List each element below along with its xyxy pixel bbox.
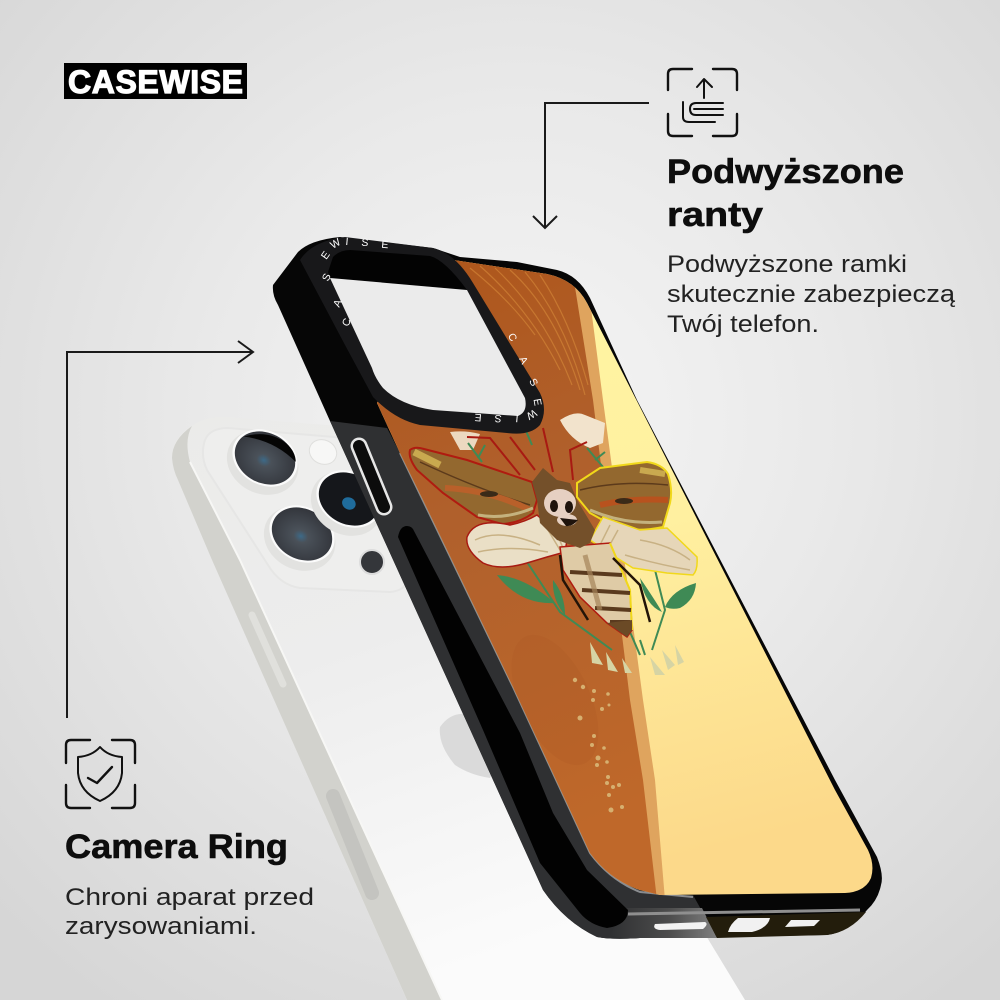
ring lettering: S — [361, 237, 369, 249]
left hindwing — [467, 515, 567, 567]
left forewing — [410, 448, 537, 524]
bottom lip gradient — [610, 908, 717, 938]
ring lettering: E — [319, 249, 333, 262]
ring lettering: A — [331, 298, 345, 309]
speaker holes — [654, 922, 707, 930]
bottom lip olive — [706, 912, 866, 938]
usb port — [728, 918, 770, 932]
abdomen tip — [607, 620, 632, 637]
abdomen right edge — [610, 543, 632, 630]
right forewing — [577, 462, 671, 530]
white phone — [172, 417, 745, 1000]
phone side band — [172, 426, 442, 1000]
bevel highlight — [400, 453, 693, 897]
arrow to camera ring — [67, 341, 253, 718]
ring lettering: E — [530, 398, 544, 407]
ring lettering: E — [381, 239, 389, 251]
side button upper — [252, 615, 283, 684]
description: raised edges: Twój telefon. — [667, 311, 819, 338]
arrow to raised edges — [533, 103, 649, 228]
orange field — [370, 250, 657, 900]
right flower — [560, 413, 605, 448]
description: camera ring — [65, 884, 314, 940]
moth illustration — [410, 413, 697, 812]
seed marks — [590, 642, 684, 675]
abdomen spine — [585, 555, 600, 610]
skull — [544, 489, 578, 526]
ring lettering: W — [328, 236, 343, 252]
description: raised edges — [667, 251, 956, 338]
icon: shield — [66, 740, 135, 808]
microphone hole — [785, 920, 820, 927]
ring lettering: S — [494, 412, 502, 424]
orange band — [370, 250, 665, 900]
lens 3 — [299, 458, 394, 548]
lens 1 — [215, 417, 310, 507]
black phone case — [273, 237, 882, 939]
icon: raised edge — [668, 69, 737, 136]
left flower — [450, 431, 480, 450]
lower lip line — [628, 910, 860, 914]
logo: CASEWISE — [68, 64, 243, 100]
ring lettering: A — [516, 355, 530, 366]
wood grain — [470, 266, 588, 395]
gold specks — [573, 678, 624, 812]
right hindwing — [590, 517, 697, 575]
ring lettering: C — [505, 331, 519, 344]
darker blotch — [494, 622, 616, 778]
lens 2 — [252, 493, 347, 583]
right leaf — [665, 583, 696, 609]
button slot — [359, 446, 384, 507]
ring lettering — [319, 236, 544, 424]
abdomen — [560, 543, 632, 637]
side button lower — [333, 796, 372, 893]
description: raised edges: Podwyższone ramki — [667, 251, 907, 278]
camera plateau — [203, 428, 406, 592]
side opening — [398, 526, 628, 928]
ring lettering: E — [474, 411, 482, 423]
band highlight — [190, 462, 442, 1000]
ring lettering: W — [524, 406, 539, 422]
thorax — [532, 468, 595, 548]
heading: Podwyższone ranty: ranty — [667, 196, 763, 234]
heading: Camera Ring: Camera Ring — [65, 828, 288, 866]
stems and small leaves — [468, 431, 665, 655]
back artwork panel — [370, 250, 890, 910]
flash — [305, 435, 341, 469]
heading: Podwyższone ranty — [667, 153, 904, 234]
window interior dark top — [328, 250, 467, 290]
lidar sensor — [360, 550, 384, 574]
right forewing detail — [580, 470, 668, 522]
ring lettering: I — [345, 236, 349, 248]
heading: Podwyższone ranty: Podwyższone — [667, 153, 904, 191]
ring lettering: S — [526, 377, 540, 388]
window opening — [330, 278, 526, 416]
ring lettering: S — [320, 272, 334, 283]
ring lettering: C — [340, 316, 354, 328]
wing folds — [475, 522, 690, 570]
black legs lower — [560, 555, 650, 622]
abdomen stripes — [570, 572, 631, 622]
description: raised edges: skutecznie zabezpieczą — [667, 281, 956, 308]
legs — [467, 428, 587, 480]
green leaves — [497, 575, 555, 603]
apple logo — [440, 714, 497, 778]
camera ring — [300, 236, 544, 434]
description: camera ring: zarysowaniami. — [65, 913, 257, 940]
ring lettering: I — [515, 412, 519, 424]
slim leaves — [553, 578, 662, 615]
case wall over white phone — [330, 421, 717, 939]
left forewing detail — [414, 452, 533, 516]
description: camera ring: Chroni aparat przed — [65, 884, 314, 911]
